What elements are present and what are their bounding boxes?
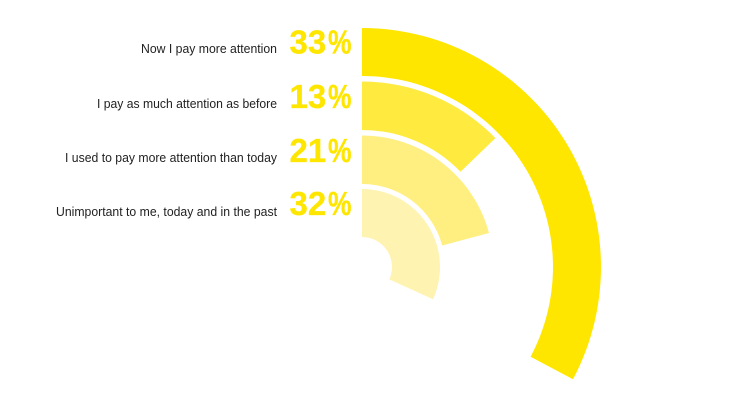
row: I used to pay more attention than today [65,132,352,169]
row: I pay as much attention as before [97,78,352,115]
value: 13%: % [328,78,352,115]
value: 32%: % [328,185,352,222]
arc: 13% [362,81,495,172]
row: now I pay more attention [141,24,352,60]
value: 21%: 21 [290,132,326,169]
arc: 21% [362,136,489,246]
label: now I pay more attention: Now I pay more attention [141,41,277,56]
value: 32%: 32 [290,185,326,222]
value: 13%: 13 [290,78,326,115]
label: I pay as much attention as before: I pay as much attention as before [97,96,277,111]
arc: 32% [362,189,440,299]
value: 33%: 33 [290,24,326,60]
arc: 33% [362,28,601,379]
value: 33%: % [328,24,352,60]
row: unimportant to me [56,185,352,222]
value: 21%: % [328,132,352,169]
label: unimportant to me, today and in the past: Unimportant to me, today and in the past [56,204,277,219]
label: I used to pay more attention than today: I used to pay more attention than today [65,150,277,165]
